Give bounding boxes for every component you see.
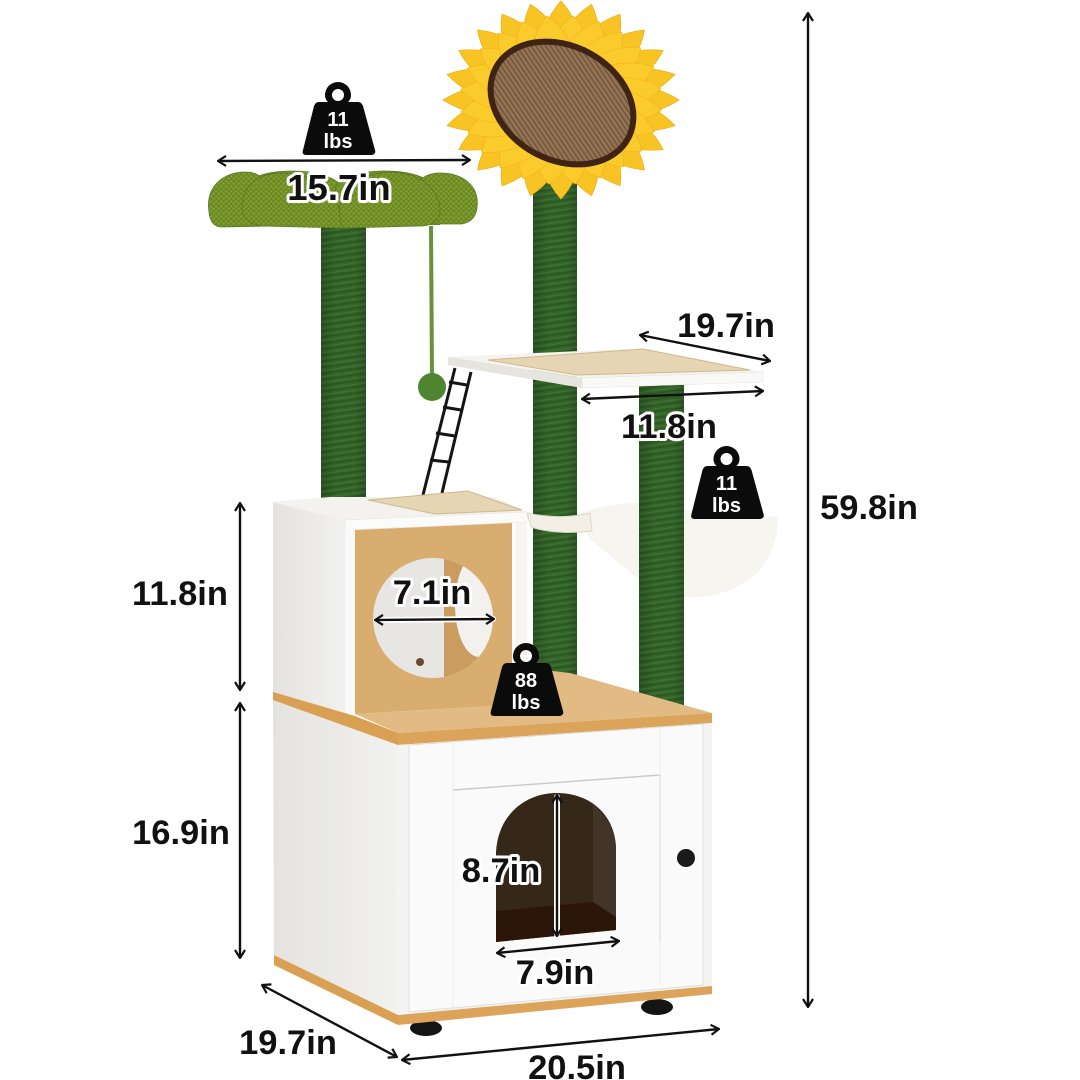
hanging toy rope and ball bbox=[418, 226, 446, 401]
weight badge: 11 lbs hammock bbox=[691, 446, 764, 519]
round opening bbox=[373, 558, 493, 678]
dimension: base depth 19.7in: 19.7in bbox=[239, 1024, 337, 1062]
cat tree product illustration bbox=[208, 0, 778, 1036]
dimension: round opening 7.1in bbox=[375, 574, 494, 620]
weight badge: 11 lbs top perch: lbs bbox=[324, 131, 352, 153]
hammock bowl bbox=[527, 500, 778, 610]
lower cabinet bbox=[273, 668, 712, 1036]
weight badge: 11 lbs hammock: lbs bbox=[712, 495, 741, 517]
dimension: cabinet height 16.9in: 16.9in bbox=[132, 814, 230, 852]
cabinet front bbox=[398, 723, 712, 1015]
sisal scratching oval bbox=[469, 17, 655, 189]
dimension: platform depth 19.7in: 19.7in bbox=[677, 307, 775, 345]
weight badge: 11 lbs top perch: 11 bbox=[327, 109, 349, 131]
dimension: arch width 7.9in: 7.9in bbox=[516, 954, 594, 992]
feet bbox=[410, 999, 673, 1036]
dimension: total height 59.8in: 59.8in bbox=[820, 489, 918, 527]
sisal mat on cube bbox=[368, 491, 522, 514]
weight badge: 88 lbs cabinet: lbs bbox=[512, 692, 540, 714]
center sisal post bbox=[533, 180, 577, 680]
door bbox=[409, 724, 703, 1012]
ladder bbox=[423, 368, 471, 495]
dimension: base width 20.5in bbox=[402, 1029, 719, 1080]
weight badge: 11 lbs top perch bbox=[303, 82, 375, 155]
upper cube box bbox=[272, 491, 527, 717]
inner petals bbox=[458, 14, 664, 186]
sunflower head bbox=[441, 0, 681, 201]
door knob bbox=[677, 849, 695, 867]
upper platform bbox=[448, 349, 763, 388]
dimension: round opening 7.1in: 7.1in bbox=[393, 574, 471, 612]
dimension: platform depth 19.7in bbox=[640, 307, 775, 361]
dimension: arch width 7.9in bbox=[497, 941, 619, 992]
dimension: platform width 11.8in bbox=[582, 391, 763, 446]
weight badge: 88 lbs cabinet: 88 bbox=[515, 670, 537, 692]
dimension: platform width 11.8in: 11.8in bbox=[621, 408, 717, 446]
door arch opening bbox=[496, 793, 616, 942]
dimension: cube height 11.8in: 11.8in bbox=[132, 575, 228, 613]
right sisal post bbox=[639, 380, 684, 713]
wood base strips bbox=[274, 955, 398, 1025]
dimension: base depth 19.7in bbox=[239, 985, 397, 1062]
cabinet side bbox=[273, 698, 398, 1015]
outer petals bbox=[441, 0, 681, 201]
weight badge: 88 lbs cabinet bbox=[491, 643, 563, 716]
wood top face bbox=[355, 668, 712, 733]
dimension: perch width 15.7in: 15.7in bbox=[287, 167, 391, 208]
dimension: arch height 8.7in: 8.7in bbox=[462, 852, 540, 890]
green cushion perch bbox=[208, 171, 477, 228]
left sisal post bbox=[321, 222, 366, 508]
weight badge: 11 lbs hammock: 11 bbox=[716, 473, 737, 495]
